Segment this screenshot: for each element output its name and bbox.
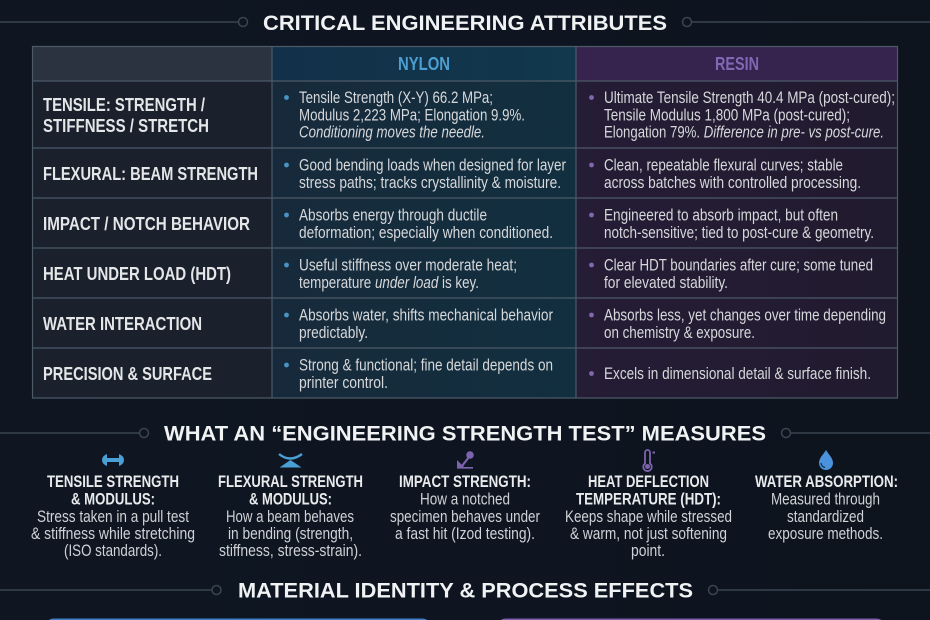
row: tensile bbox=[43, 89, 895, 142]
row: tensile: Conditioning moves the needle. bbox=[299, 124, 485, 142]
row: flexural: Clean, repeatable flexural curves; stable bbox=[604, 156, 843, 174]
column: tensile strength: (ISO standards). bbox=[64, 542, 162, 560]
column: flexural strength: FLEXURAL STRENGTH bbox=[218, 472, 363, 491]
row: impact: notch-sensitive; tied to post-cure & geometry. bbox=[604, 224, 874, 242]
panel: nylon card top bbox=[46, 618, 430, 620]
icon: bending beam bbox=[279, 454, 302, 468]
column: impact strength bbox=[390, 451, 540, 543]
row: flexural bbox=[43, 156, 861, 192]
row: impact: deformation; especially when conditioned. bbox=[299, 224, 553, 242]
column: water absorption: exposure methods. bbox=[768, 525, 883, 543]
table header row: NYLON bbox=[398, 53, 450, 74]
row: flexural: stress paths; tracks crystallinity & moisture. bbox=[299, 174, 561, 192]
icon: water drop bbox=[819, 450, 833, 470]
column: tensile strength: TENSILE STRENGTH bbox=[47, 472, 179, 491]
heading: material identity and process effects bbox=[0, 580, 930, 602]
column: flexural strength: How a beam behaves bbox=[226, 508, 354, 526]
column: heat deflection: & warm, not just softening bbox=[570, 525, 727, 543]
row: water: Absorbs water, shifts mechanical behavior bbox=[299, 306, 553, 324]
row: tensile: STIFFNESS / STRETCH bbox=[43, 115, 209, 136]
row: tensile: Modulus 2,223 MPa; Elongation 9.9%. bbox=[299, 106, 525, 124]
column: tensile strength: Stress taken in a pull test bbox=[37, 508, 189, 526]
column: heat deflection bbox=[565, 450, 732, 560]
row: precision: Strong & functional; fine detail depends on bbox=[299, 356, 553, 374]
row: tensile: TENSILE: STRENGTH / bbox=[43, 94, 205, 115]
table header row: RESIN bbox=[715, 53, 759, 74]
row: precision: Excels in dimensional detail & surface finish. bbox=[604, 365, 871, 383]
column: flexural strength bbox=[218, 454, 363, 560]
column: impact strength: IMPACT STRENGTH: bbox=[399, 472, 531, 491]
row: water: predictably. bbox=[299, 324, 368, 342]
column: impact strength: specimen behaves under bbox=[390, 508, 540, 526]
column: heat deflection: Keeps shape while stressed bbox=[565, 508, 732, 526]
row: water: WATER INTERACTION bbox=[43, 313, 202, 334]
row: flexural: across batches with controlled processing. bbox=[604, 174, 861, 192]
table header row bbox=[32, 46, 898, 81]
column: tensile strength: & MODULUS: bbox=[71, 490, 155, 508]
row: impact: IMPACT / NOTCH BEHAVIOR bbox=[43, 213, 250, 234]
row: flexural: Good bending loads when designed for layer bbox=[299, 156, 566, 174]
panel: resin card top bbox=[498, 618, 884, 620]
column: heat deflection: HEAT DEFLECTION bbox=[588, 472, 709, 491]
comparison table bbox=[32, 46, 898, 398]
heading: critical engineering attributes bbox=[0, 12, 930, 35]
heading: what an engineering strength test measures: WHAT AN “ENGINEERING STRENGTH TEST” MEASURES bbox=[164, 422, 766, 446]
column: flexural strength: stiffness, stress-strain). bbox=[219, 542, 362, 560]
heading: critical engineering attributes: CRITICAL ENGINEERING ATTRIBUTES bbox=[263, 12, 667, 35]
row: water: on chemistry & exposure. bbox=[604, 324, 755, 342]
column: water absorption bbox=[755, 450, 898, 543]
row: impact: Engineered to absorb impact, but often bbox=[604, 206, 838, 224]
column: heat deflection: TEMPERATURE (HDT): bbox=[576, 490, 721, 508]
column: water absorption: standardized bbox=[787, 508, 864, 526]
row: precision bbox=[43, 356, 871, 392]
row: heat: Clear HDT boundaries after cure; some tuned bbox=[604, 256, 873, 274]
row: heat: for elevated stability. bbox=[604, 274, 728, 292]
column: water absorption: Measured through bbox=[771, 490, 880, 508]
column: impact strength: a fast hit (Izod testing). bbox=[395, 525, 535, 543]
column: tensile strength bbox=[31, 454, 195, 560]
row: water bbox=[43, 306, 886, 342]
row: impact bbox=[43, 206, 874, 242]
row: heat: Useful stiffness over moderate heat; bbox=[299, 256, 517, 274]
heading: what an engineering strength test measures bbox=[0, 422, 930, 446]
column: flexural strength: & MODULUS: bbox=[249, 490, 332, 508]
row: heat bbox=[43, 256, 873, 292]
row: heat: temperature under load is key. bbox=[299, 274, 479, 292]
column: heat deflection: point. bbox=[631, 542, 665, 560]
row: precision: PRECISION & SURFACE bbox=[43, 363, 212, 384]
column: impact strength: How a notched bbox=[420, 490, 510, 508]
column: tensile strength: & stiffness while stretching bbox=[31, 525, 195, 543]
row: tensile: Tensile Modulus 1,800 MPa (post-cured); bbox=[604, 106, 850, 124]
icon: tensile arrows bbox=[102, 454, 124, 466]
icon: thermometer bbox=[643, 450, 655, 471]
row: heat: HEAT UNDER LOAD (HDT) bbox=[43, 263, 231, 284]
row: tensile: Elongation 79%. Difference in pre- vs post-cure. bbox=[604, 124, 884, 142]
column: flexural strength: in bending (strength, bbox=[228, 525, 353, 543]
row: tensile: Tensile Strength (X-Y) 66.2 MPa; bbox=[299, 89, 493, 107]
row: flexural: FLEXURAL: BEAM STRENGTH bbox=[43, 163, 258, 184]
row: impact: Absorbs energy through ductile bbox=[299, 206, 487, 224]
icon: impact hammer bbox=[457, 451, 474, 469]
heading: material identity and process effects: MATERIAL IDENTITY & PROCESS EFFECTS bbox=[238, 580, 693, 602]
row: precision: printer control. bbox=[299, 374, 388, 392]
